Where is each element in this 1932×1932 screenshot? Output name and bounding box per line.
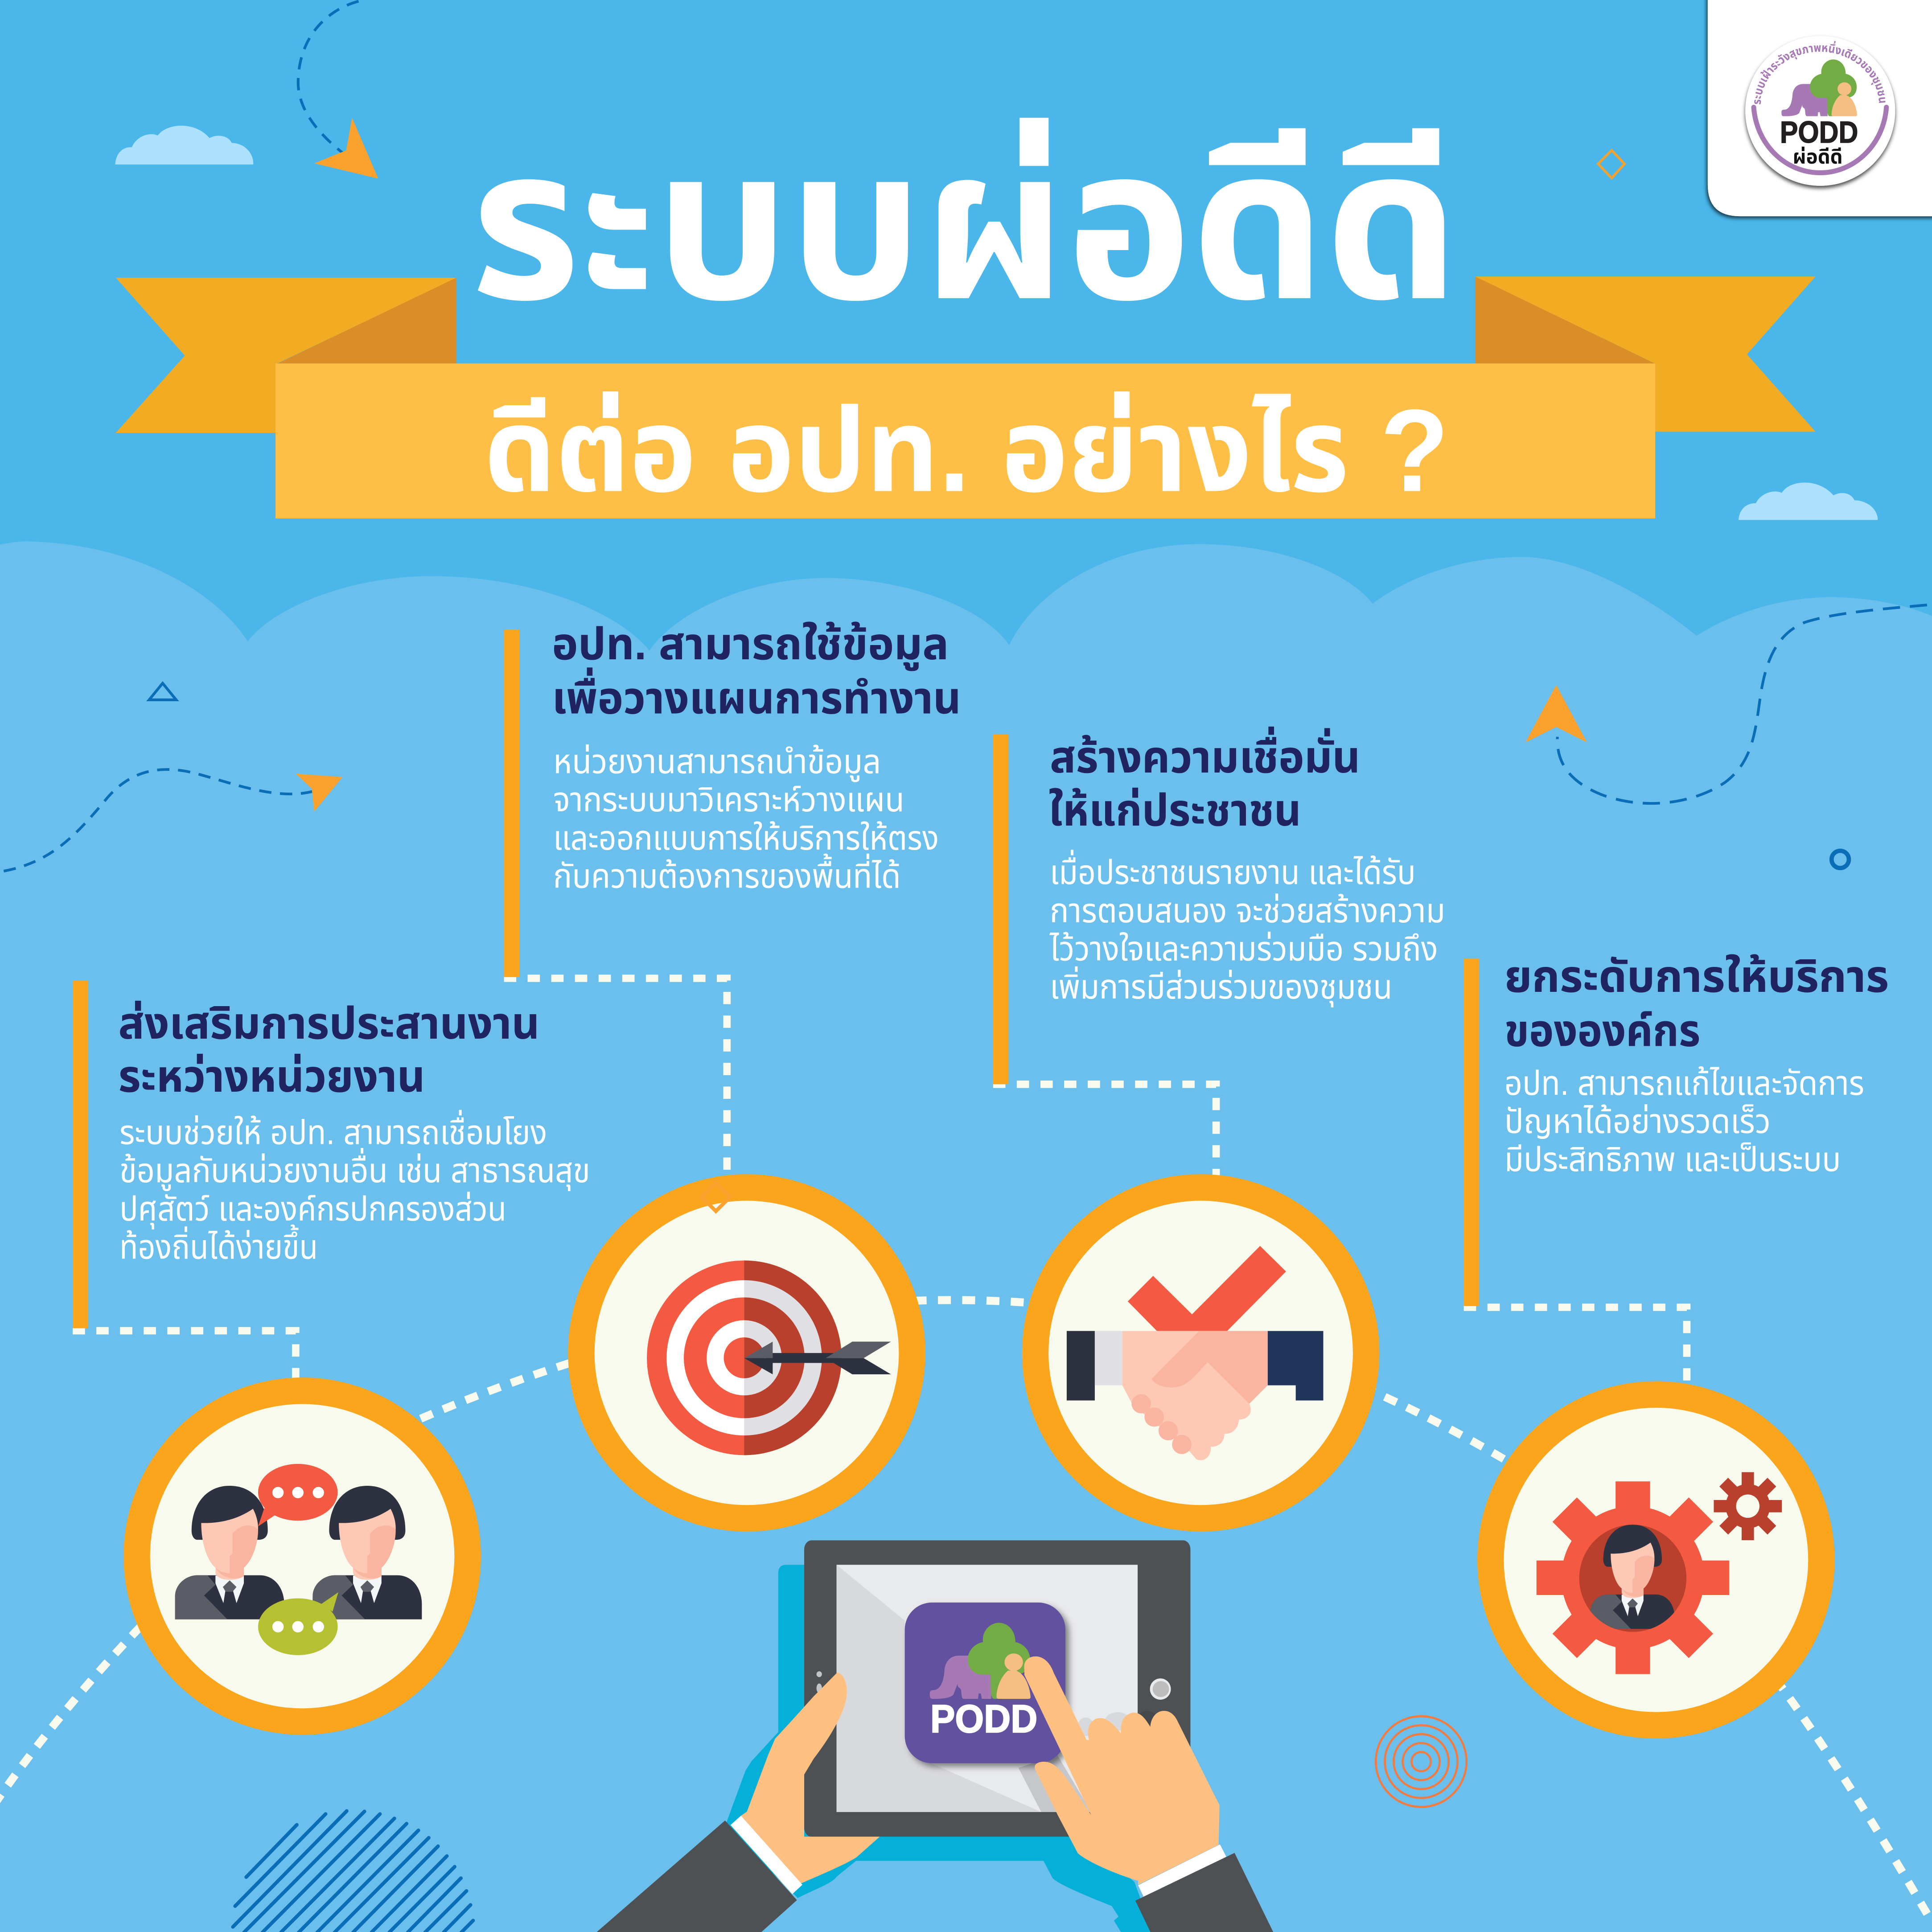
ribbon: right tail [1475,276,1816,432]
body text: เพิ่มการมีส่วนร่วมของชุมชน [1050,966,1392,1007]
body text: ระบบช่วยให้ อปท. สามารถเชื่อมโยง [119,1110,547,1151]
tablet with hands [597,1540,1273,1932]
body text: และออกแบบการให้บริการให้ตรง [553,819,939,857]
body text: ปศุสัตว์ และองค์กรปกครองส่วน [119,1190,506,1229]
decoration: diamond [1598,150,1624,178]
decoration: concentric rings [1376,1716,1467,1807]
body text: การตอบสนอง จะช่วยสร้างความ [1050,892,1445,930]
dashed flight path: top [298,1,358,153]
heading: สร้างความเชื่อมั่น [1050,726,1360,782]
body text: จากระบบมาวิเคราะห์วางแผน [553,781,904,819]
heading: อปท. สามารถใช้ข้อมูล [552,620,949,671]
body text: อปท. สามารถแก้ไขและจัดการ [1504,1065,1864,1102]
body text [1049,850,1445,1007]
subtitle: ดีต่อ อปท. อย่างไร ? [484,385,1449,516]
body text: ปัญหาได้อย่างรวดเร็ว [1504,1103,1771,1141]
body text: ข้อมูลกับหน่วยงานอื่น เช่น สาธารณสุข [119,1148,590,1191]
panel: planning text [504,620,961,977]
body text: ท้องถิ่นได้ง่ายขึ้น [119,1224,318,1266]
body text: มีประสิทธิภาพ และเป็นระบบ [1504,1141,1841,1179]
logo badge [1745,36,1895,186]
accent bar [1464,958,1479,1306]
icon: people talking [123,1377,481,1735]
body text: ไว้วางใจและความร่วมมือ รวมถึง [1049,930,1438,968]
logo mark [1781,59,1857,116]
heading line 2: ให้แก่ประชาชน [1048,786,1301,835]
accent bar [73,981,88,1328]
body text [1504,1065,1864,1179]
icon: target and dart [568,1174,925,1532]
ribbon: right fold [1475,276,1655,363]
purple arc [1754,107,1887,173]
connector: planning [504,978,727,1177]
dashed flight path: right [1558,605,1927,803]
heading line 2: ขององค์กร [1504,1007,1700,1056]
curved tagline [1761,52,1879,105]
arrow head: right [1525,685,1587,743]
heading line 2: ระหว่างหน่วยงาน [118,1052,425,1102]
accent bar [504,629,519,977]
icon: gears with person [1477,1381,1835,1739]
white dashed arc behind icons [0,1300,1932,1922]
body text: กับความต้องการของพื้นที่ได้ [553,853,901,895]
logo wordmark: PODD [1780,115,1858,149]
icon: handshake and check mark [1022,1174,1379,1532]
logo badge: ระบบเฝ้าระวังสุขภาพหนึ่งเดียวของชุมชน [1750,40,1890,105]
ribbon: left tail [116,278,457,433]
logo card [1708,0,1932,216]
connector: coordination [73,1331,296,1380]
logo thai name: ผ่อดีดี [1793,146,1843,168]
heading: ยกระดับการให้บริการ [1504,952,1889,1002]
PODD app icon [905,1603,1065,1763]
body text [119,1110,590,1266]
scalloped cloud background [0,541,1932,1932]
app icon label: PODD [930,1697,1037,1741]
tablet body [804,1540,1190,1837]
panel: service text [1464,952,1889,1306]
arrow head: top [314,118,378,179]
dashed flight path: left [4,769,314,871]
panel: coordination text [73,981,590,1328]
accent bar [993,734,1008,1084]
app icon logo mark [930,1623,1031,1699]
ribbon: main band [275,363,1655,518]
ribbon [116,276,1816,518]
decoration: ring [1832,851,1849,868]
body text: เมื่อประชาชนรายงาน และได้รับ [1050,850,1416,892]
decoration: triangle [149,683,176,700]
arrow head: left [296,774,342,812]
body text [553,743,939,895]
panel: trust text [993,726,1445,1084]
title: ระบบผ่อดีดี [471,107,1459,343]
cloud: right [1739,482,1878,520]
heading: ส่งเสริมการประสานงาน [118,999,540,1048]
ribbon: left fold [278,278,456,363]
connector: trust [993,1084,1216,1177]
cloud: top left [115,126,253,164]
tablet shadow [725,1565,1153,1932]
hands [597,1657,1273,1932]
decoration: hatched circle [233,1811,473,1932]
connector: service [1464,1307,1687,1385]
heading line 2: เพื่อวางแผนการทำงาน [552,667,961,723]
body text: หน่วยงานสามารถนำข้อมูล [553,743,881,782]
